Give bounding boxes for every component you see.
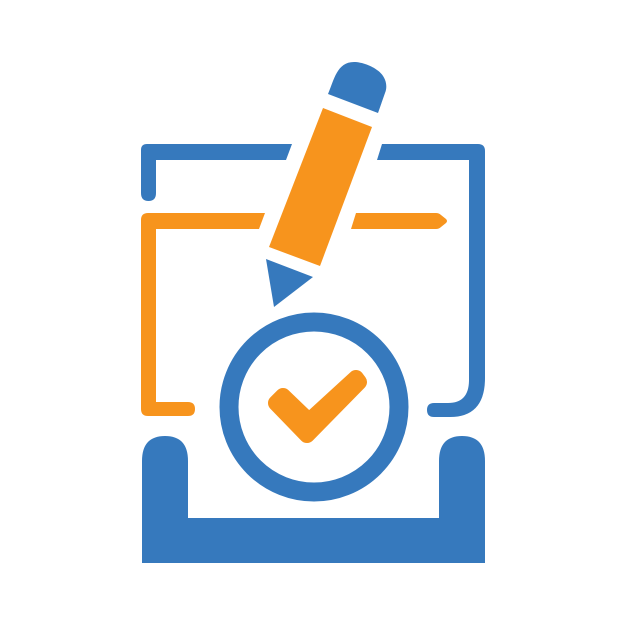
icon: circle badge (229, 322, 399, 492)
pencil tip (266, 259, 313, 307)
icon: tray (142, 436, 485, 563)
icon: check mark (276, 378, 359, 435)
icon: pencil (266, 62, 386, 307)
pencil body (269, 108, 372, 266)
icon: orange text line and bracket (141, 213, 447, 416)
pencil eraser (328, 62, 386, 113)
icon: blue document outline (141, 144, 485, 417)
